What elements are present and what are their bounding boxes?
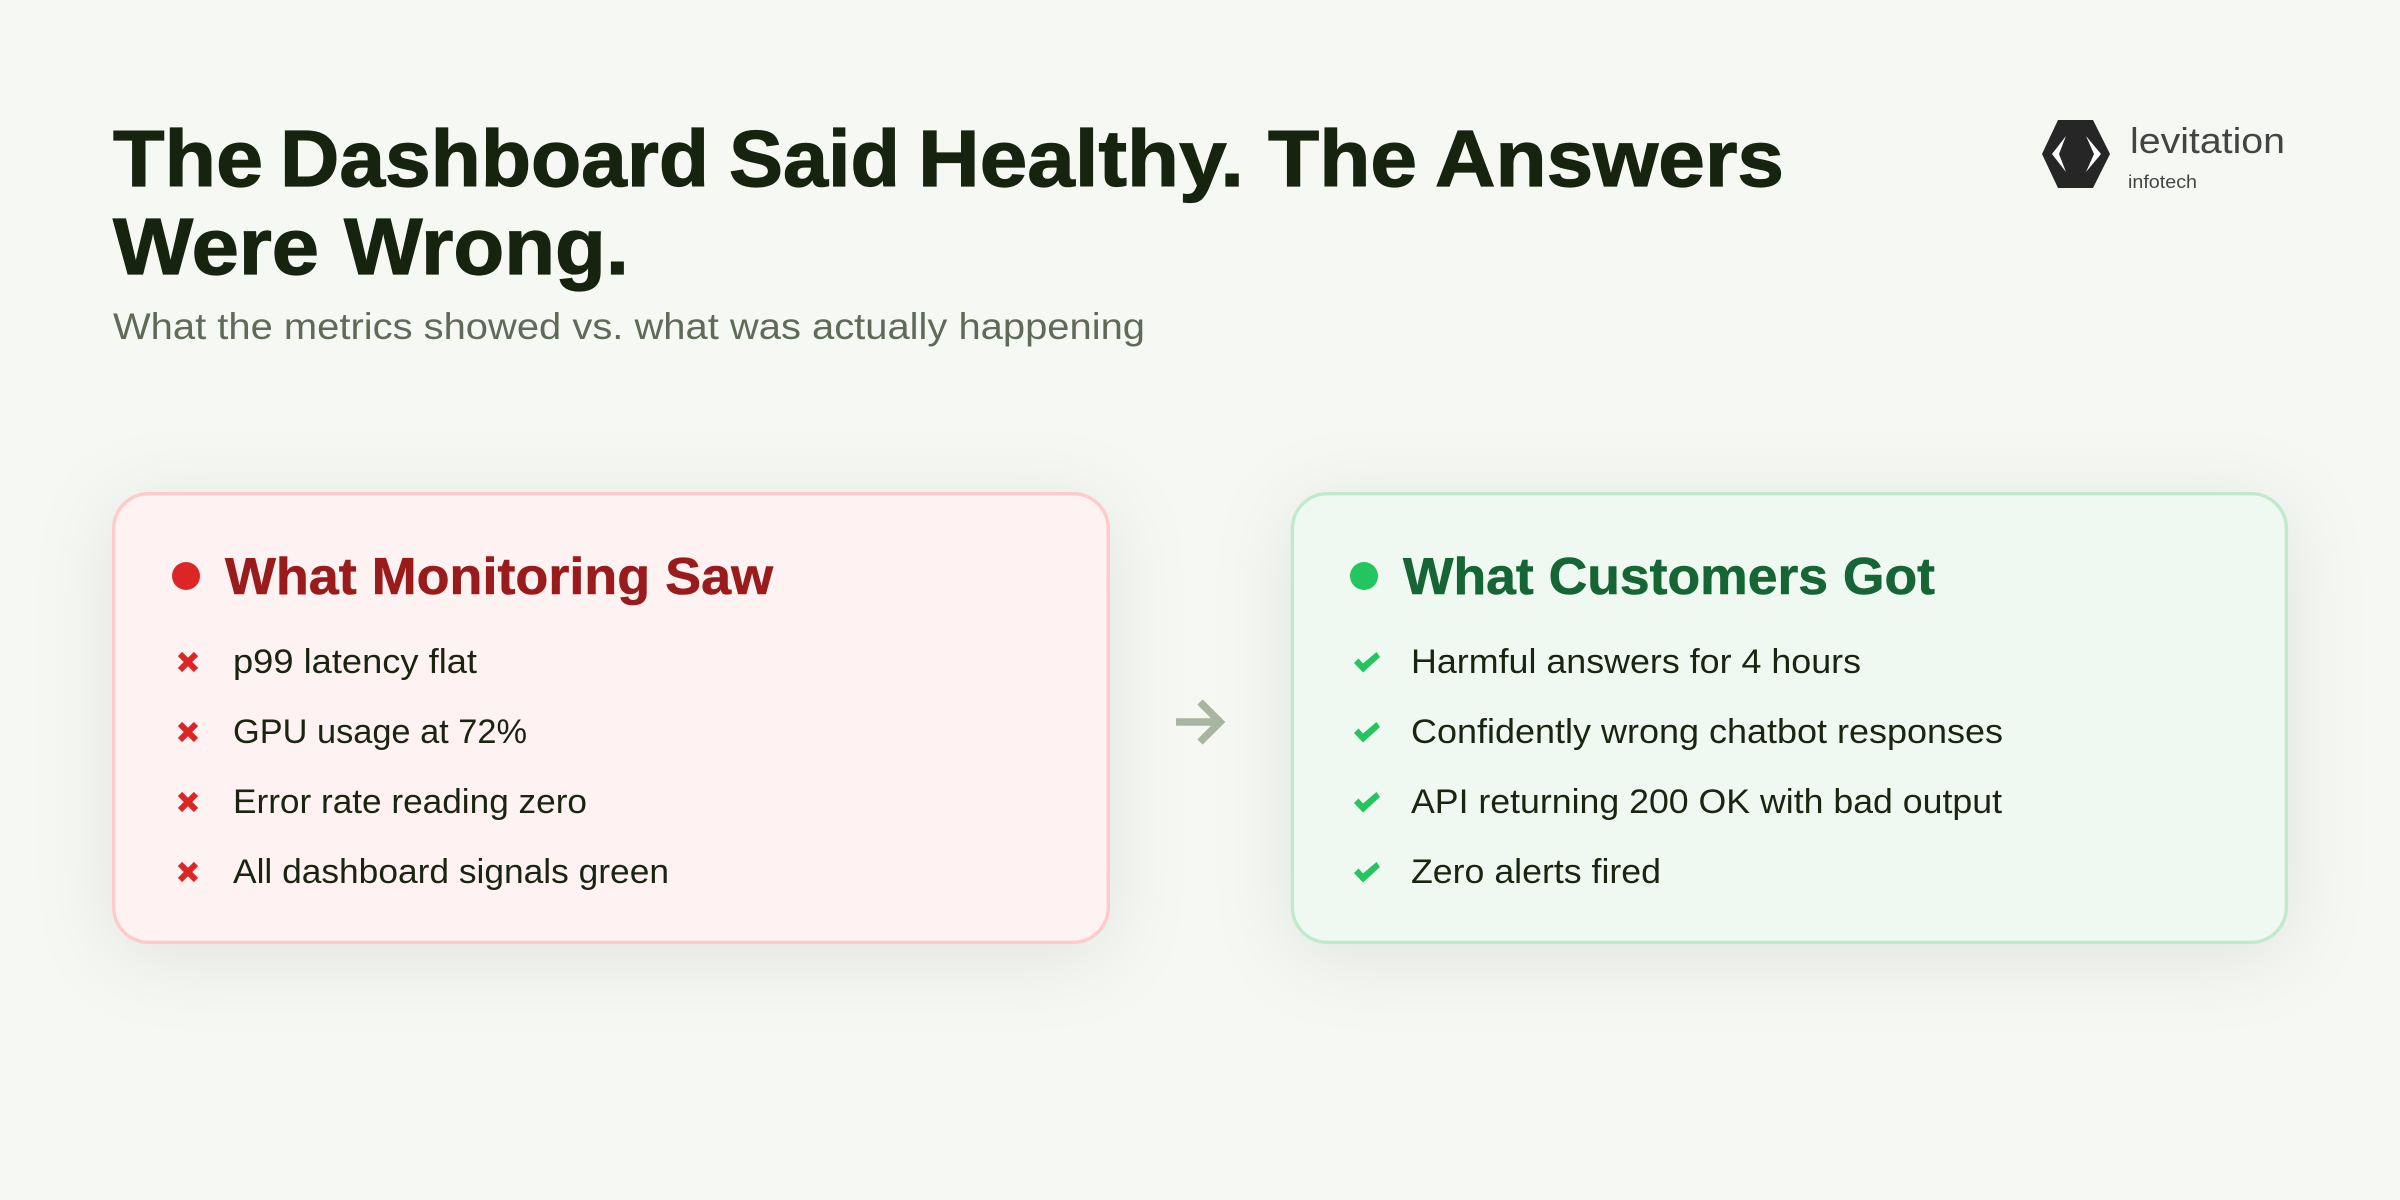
title: Answers [1435, 114, 1784, 203]
panel: what monitoring saw [114, 494, 1108, 942]
status dot: green [1350, 562, 1378, 590]
list row: GPU usage: GPU usage at 72% [233, 713, 527, 751]
panel background [1292, 494, 2286, 942]
list row: p99 latency: p99 latency flat [233, 643, 478, 681]
panel background [114, 494, 1108, 942]
list row: API returning: API returning 200 OK with bad output [1411, 783, 2003, 821]
heading: What Monitoring Saw [225, 548, 774, 606]
heading: What Customers Got [1403, 548, 1935, 606]
title: Wrong. [344, 202, 629, 291]
list row: zero alerts: Zero alerts fired [1411, 853, 1661, 891]
icon: hexagon logo mark [2042, 120, 2110, 188]
list row: confidently wrong: Confidently wrong chatbot responses [1411, 713, 2003, 751]
title: Were [113, 202, 319, 291]
status dot: red [172, 562, 200, 590]
title: Dashboard [280, 114, 709, 203]
list row: dashboard signals: All dashboard signals green [233, 853, 669, 891]
logo: levitation infotech [2042, 120, 2285, 192]
title: Healthy. [918, 114, 1244, 203]
list row: error rate: Error rate reading zero [233, 783, 587, 821]
title: The [113, 114, 263, 203]
arrow [1176, 702, 1222, 742]
logo wordmark: levitation [2130, 120, 2285, 161]
panel: what customers got [1292, 494, 2286, 942]
logo tagline: infotech [2128, 172, 2197, 192]
title: Said [729, 114, 900, 203]
list row: harmful answers: Harmful answers for 4 hours [1411, 643, 1861, 681]
subtitle: What the metrics showed vs. what was actually happening [113, 306, 1145, 347]
title [113, 114, 1784, 291]
title: The [1268, 114, 1417, 203]
